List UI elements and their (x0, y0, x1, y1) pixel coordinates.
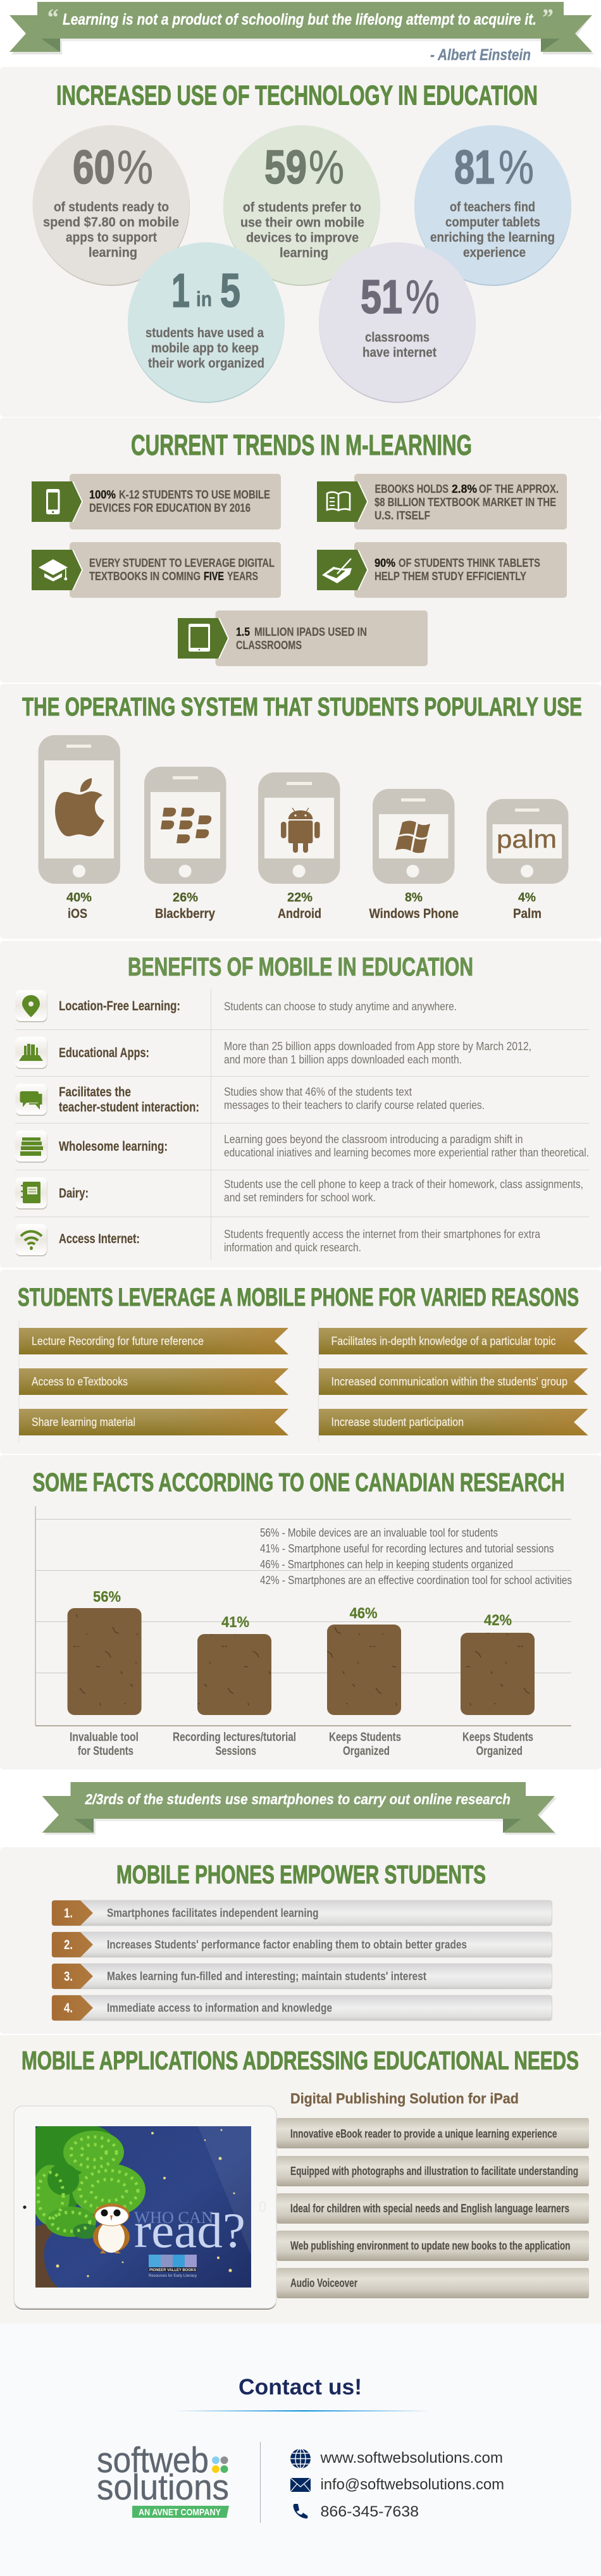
trend card: iPads: MILLION IPADS USED IN (254, 626, 367, 638)
stat circle: 81%: enriching the learning (430, 230, 555, 245)
callout ribbon: online research (42, 1782, 557, 1835)
quote mark right: ” (541, 4, 553, 31)
softweb solutions logo: AN AVNET COMPANY (139, 2507, 221, 2518)
iPad illustration (14, 2106, 276, 2310)
list row 4 (52, 1995, 552, 2021)
benefit row: location-free learning (15, 990, 457, 1022)
stat circle: 60%: 60 (73, 140, 115, 194)
list row 1: 1. (64, 1906, 73, 1921)
icon: chat bubbles (20, 1091, 42, 1110)
trend card: digital textbooks: YEARS (227, 570, 258, 583)
publisher logo (149, 2255, 197, 2278)
contact: phone: 866-345-7638 (320, 2503, 419, 2520)
stat circle: 60% (33, 125, 190, 286)
bar: 46%: Organized (343, 1744, 390, 1758)
bar: 46% (327, 1605, 401, 1758)
phone: Blackberry 26%: 26% (173, 890, 198, 905)
stat circle: 81%: computer tablets (445, 214, 540, 230)
icon: open book (327, 492, 350, 511)
publisher logo: PIONEER VALLEY BOOKS (149, 2268, 197, 2272)
stat circle: 60%: apps to support (66, 230, 157, 245)
phone: Blackberry 26% (144, 767, 226, 921)
list row 3 (52, 1964, 552, 1989)
stat circle: 51%: 51 (361, 270, 402, 323)
trend card: tablets study (317, 542, 567, 598)
stat circle: 81%: 81 (454, 140, 495, 194)
benefit row: access internet (15, 1224, 541, 1256)
panel: benefits of mobile in education (0, 941, 601, 1268)
phone: Palm 4%: Palm (513, 907, 542, 921)
bar: 41%: Recording lectures/tutorial (173, 1730, 296, 1744)
trend card: ebooks: $8 BILLION TEXTBOOK MARKET IN THE (375, 496, 556, 509)
reason ribbon: in-depth knowledge (319, 1328, 588, 1354)
stat circle: 1 in 5: 5 (220, 264, 240, 317)
benefit row: diary: and set reminders for school work. (224, 1191, 376, 1204)
stat circle: 59%: learning (280, 245, 328, 261)
benefit row: educational apps: and more than 1 billion apps downloaded each month. (224, 1053, 462, 1066)
phone: Android 22%: Android (278, 907, 321, 921)
stat circle: 59% (223, 125, 380, 286)
list row 1 (52, 1900, 552, 1926)
benefit row: teacher-student interaction: Facilitates the (59, 1085, 131, 1099)
feature bar 5: Audio Voiceover (290, 2277, 357, 2289)
panel: mobile applications (0, 2035, 601, 2324)
bar: 41%: 41% (221, 1614, 249, 1631)
bar: 56%: Invaluable tool (70, 1730, 139, 1744)
trend card: digital textbooks: FIVE (204, 570, 224, 583)
bar: 46%: 46% (350, 1605, 378, 1622)
contact: email: info@softwebsolutions.com (320, 2476, 504, 2493)
benefit row: teacher-student interaction: messages to their teachers to clarify course related queries. (224, 1098, 485, 1112)
quote author: - Albert Einstein (430, 46, 531, 64)
feature bar 5 (277, 2268, 589, 2298)
icon: handset (294, 2504, 307, 2518)
icon: apps on tablet (19, 1044, 43, 1061)
trend card: ebooks: EBOOKS HOLDS (375, 483, 449, 495)
panel: mobile phones empower students (0, 1847, 601, 2034)
benefit row: teacher-student interaction: teacher-student interaction: (59, 1100, 199, 1115)
feature bar 3 (277, 2193, 589, 2224)
bar: 42%: 42% (484, 1612, 512, 1629)
benefit row: diary: Dairy: (59, 1186, 89, 1201)
phone: Windows Phone 8%: Windows Phone (369, 907, 459, 921)
icon: globe (290, 2449, 311, 2468)
icon: android logo (281, 808, 320, 853)
list row 2 (52, 1932, 552, 1957)
softweb solutions logo: solutions (97, 2467, 229, 2508)
bar: 42%: Organized (476, 1744, 523, 1758)
feature bar 2 (277, 2156, 589, 2186)
phone: Palm 4%: 4% (518, 890, 536, 905)
trend card: tablets study: HELP THEM STUDY EFFICIENTLY (375, 570, 526, 583)
phone: iOS 40%: iOS (68, 907, 87, 921)
trend card: ebooks: OF THE APPROX. (479, 483, 559, 495)
phone: Android 22%: 22% (287, 890, 313, 905)
icon: wifi (21, 1231, 42, 1250)
stat circle: 51%: have internet (362, 345, 437, 360)
icon: graduation cap (39, 559, 68, 581)
trend card: digital textbooks: EVERY STUDENT TO LEVERAGE DIGITAL (89, 557, 275, 569)
heading: BENEFITS OF MOBILE IN EDUCATION (128, 952, 473, 981)
panel: increased use of technology (0, 67, 601, 417)
stat circle: 60%: % (117, 140, 153, 194)
trend card: ebooks: 2.8% (452, 483, 477, 495)
benefit row: educational apps: More than 25 billion apps downloaded from App store by March 2012, (224, 1039, 531, 1053)
stat circle: 59%: devices to improve (246, 230, 359, 245)
benefit row: wholesome learning: Learning goes beyond the classroom introducing a paradigm shift in (224, 1132, 523, 1146)
trend card: mobile devices (32, 474, 281, 529)
trend card: digital textbooks: TEXTBOOKS IN COMING (89, 570, 201, 583)
benefit row: wholesome learning (15, 1130, 589, 1163)
phone: iOS 40% (38, 735, 120, 921)
stat circle: 1 in 5: 1 (171, 264, 190, 317)
bar: 42%: Keeps Students (462, 1730, 533, 1744)
stat circle: 60%: spend $7.80 on mobile (43, 214, 179, 230)
chart legend: 56% - Mobile devices are an invaluable tool for students (260, 1526, 498, 1539)
list row 2: 2. (64, 1938, 73, 1952)
stat circle: 59%: of students prefer to (243, 200, 361, 215)
icon: map pin (22, 995, 40, 1017)
benefit row: wholesome learning: Wholesome learning: (59, 1139, 168, 1154)
benefit row: teacher-student interaction: Studies show that 46% of the students text (224, 1085, 412, 1098)
stat circle: 81% (414, 125, 571, 286)
phone: iOS 40%: 40% (66, 890, 92, 905)
stat circle: 1 in 5: mobile app to keep (151, 340, 259, 356)
stat circle: 60%: of students ready to (54, 199, 169, 214)
trend card: tablets study: OF STUDENTS THINK TABLETS (399, 557, 540, 569)
stat circle: 59%: use their own mobile (240, 215, 364, 230)
softweb solutions logo (97, 2440, 229, 2518)
phone: Blackberry 26%: Blackberry (155, 907, 215, 921)
stat circle: 60%: learning (89, 245, 137, 260)
feature bar 4 (277, 2231, 589, 2261)
footer: contact (0, 2324, 601, 2576)
trend card: iPads: 1.5 (236, 626, 250, 638)
stat circle: 1 in 5 (128, 242, 285, 403)
bar: 41% (173, 1614, 296, 1758)
benefit row: educational apps (15, 1037, 531, 1069)
list row 4: Immediate access to information and knowledge (107, 2001, 332, 2014)
panel: operating systems (0, 684, 601, 939)
trend card: mobile devices: DEVICES FOR EDUCATION BY 2016 (89, 502, 251, 514)
phone: Windows Phone 8%: 8% (405, 890, 423, 905)
stat circle: 1 in 5: their work organized (148, 356, 264, 371)
trend card: iPads: CLASSROOMS (236, 639, 302, 652)
trend card: mobile devices: 100% (89, 488, 116, 501)
iPad screen: who can read (22, 2119, 251, 2288)
phone: Palm 4% (486, 799, 568, 921)
stat circle: 51%: % (406, 270, 440, 323)
stat circle: 81%: experience (463, 245, 526, 260)
reason ribbon: participation: Increase student participation (331, 1415, 464, 1428)
bar: 56%: 56% (93, 1588, 121, 1606)
stat circle: 59%: % (309, 140, 344, 194)
reason ribbon: lecture recording: Lecture Recording for future reference (32, 1334, 204, 1347)
reason ribbon: lecture recording (19, 1328, 288, 1354)
tree (35, 2126, 146, 2288)
owl (93, 2203, 130, 2253)
benefit row: diary (15, 1177, 583, 1210)
list row 3: 3. (64, 1969, 73, 1984)
chart legend (260, 1526, 572, 1587)
reason ribbon: communication: Increased communication within the students' group (331, 1375, 567, 1388)
phone: Windows Phone 8% (369, 789, 459, 921)
stars (56, 2129, 235, 2277)
list row 2: Increases Students' performance factor enabling them to obtain better grades (107, 1938, 467, 1951)
panel: current trends in m-learning (0, 418, 601, 683)
bar: 41%: Sessions (215, 1744, 256, 1758)
list row 3: Makes learning fun-filled and interesting; maintain students' interest (107, 1969, 426, 1983)
quote mark left: “ (46, 4, 58, 31)
softweb solutions logo: softweb (97, 2440, 209, 2480)
panel: students leverage a mobile phone (0, 1270, 601, 1454)
list row 1: Smartphones facilitates independent learning (107, 1906, 319, 1919)
icon: notebook (21, 1182, 40, 1203)
contact heading: Contact us! (239, 2375, 362, 2400)
bar: 42% (461, 1612, 535, 1758)
benefit row: access internet: Access Internet: (59, 1232, 140, 1246)
icon: tablet (189, 624, 210, 652)
reason ribbon: eTextbooks (19, 1368, 288, 1395)
contact: website: www.softwebsolutions.com (319, 2449, 503, 2467)
quote ribbon (9, 2, 594, 54)
stat circle: 81%: of teachers find (450, 199, 535, 214)
reason ribbon: share material: Share learning material (32, 1415, 135, 1428)
icon: windows logo (395, 820, 430, 853)
icon: book stack (20, 1137, 43, 1156)
stat circle: 1 in 5: in (196, 287, 212, 311)
reason ribbon: eTextbooks: Access to eTextbooks (32, 1375, 128, 1388)
icon: phone (46, 489, 59, 514)
list row 4: 4. (64, 2001, 73, 2016)
stat circle: 81%: % (499, 140, 534, 194)
icon: palm logo: palm (497, 826, 557, 853)
stat circle: 51% (319, 242, 476, 403)
chart legend: 41% - Smartphone useful for recording lectures and tutorial sessions (260, 1542, 554, 1555)
stat circle: 59%: 59 (264, 140, 307, 194)
iPad screen: who can read: read? (134, 2203, 245, 2258)
callout ribbon: online research: 2/3rds of the students use smartphones to carry out online research (85, 1791, 511, 1807)
benefit row: location-free learning: Location-Free Learning: (59, 999, 180, 1013)
chart legend: 46% - Smartphones can help in keeping students organized (260, 1558, 513, 1571)
reason ribbon: share material (19, 1409, 288, 1435)
screen title: WHO CAN (134, 2208, 213, 2227)
benefit row: location-free learning: Students can choose to study anytime and anywhere. (224, 1000, 457, 1013)
feature bar 1 (277, 2118, 589, 2148)
benefit row: access internet: information and quick research. (224, 1241, 361, 1254)
stat circle: 1 in 5: students have used a (146, 325, 264, 340)
benefit row: access internet: Students frequently access the internet from their smartphones for extra (224, 1227, 541, 1241)
bar: 56%: for Students (78, 1744, 133, 1758)
benefit row: educational apps: Educational Apps: (59, 1046, 149, 1060)
subheading: Digital Publishing Solution for iPad (290, 2090, 519, 2107)
reason ribbon: communication (319, 1368, 588, 1395)
icon: tablet and stylus (322, 559, 352, 583)
trend card: ebooks (317, 474, 567, 529)
stat circle: 51%: classrooms (365, 330, 430, 345)
panel: facts from Canadian research (0, 1455, 601, 1769)
bar: 56% (68, 1588, 142, 1758)
icon: envelope (290, 2478, 311, 2492)
bar: 46%: Keeps Students (329, 1730, 401, 1744)
bar chart (35, 1506, 571, 1758)
trend card: mobile devices: K-12 STUDENTS TO USE MOBILE (119, 488, 270, 501)
publisher logo: Resources for Early Literacy (149, 2274, 197, 2278)
icon: apple logo (55, 778, 104, 836)
trend card: iPads (178, 610, 428, 666)
leaf texture (38, 2137, 138, 2231)
trend card: digital textbooks (32, 542, 281, 598)
reason ribbon: in-depth knowledge: Facilitates in-depth knowledge of a particular topic (331, 1334, 555, 1347)
benefit row: teacher-student interaction (15, 1084, 485, 1116)
trend card: ebooks: U.S. ITSELF (375, 509, 430, 522)
phone: Android 22% (258, 772, 340, 921)
reason ribbon: participation (319, 1409, 588, 1435)
trend card: tablets study: 90% (375, 557, 395, 569)
icon: blackberry logo (161, 808, 211, 843)
